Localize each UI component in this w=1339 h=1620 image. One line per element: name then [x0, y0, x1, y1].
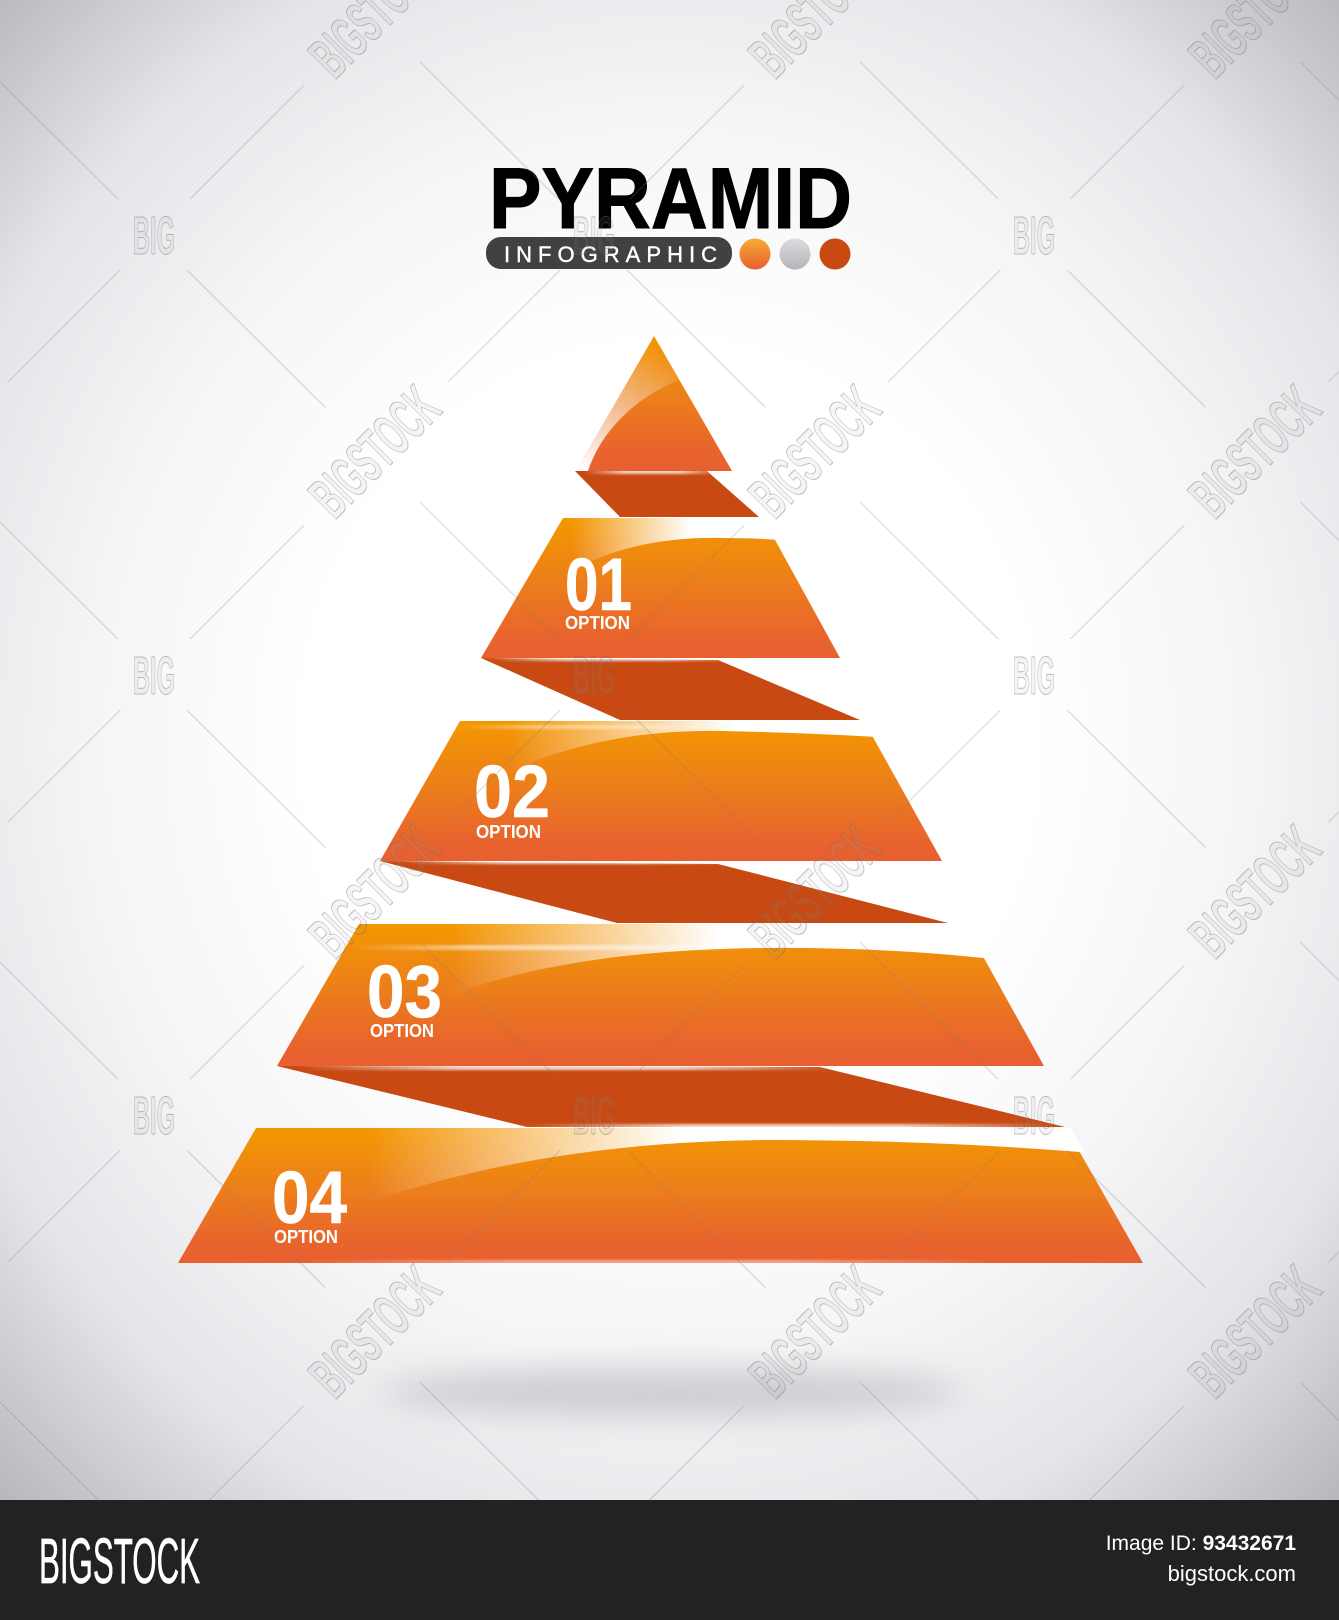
- connector band 2: [380, 858, 948, 923]
- watermark text: BIG: [133, 206, 175, 266]
- pyramid cap: [576, 336, 732, 471]
- tier 4: [178, 1128, 1143, 1264]
- ground shadow: [382, 1368, 962, 1416]
- watermark text: BIG: [1013, 206, 1055, 266]
- watermark text: BIG: [1013, 646, 1055, 706]
- tier 1 body: [481, 518, 840, 658]
- connector band 1: [481, 655, 860, 720]
- tier 3 body: [277, 924, 1044, 1066]
- site url: bigstock.com: [1168, 1561, 1296, 1586]
- watermark text: BIGSTOCK: [737, 374, 893, 530]
- tier 2 highlight line: [455, 725, 715, 729]
- watermark text: BIGSTOCK: [297, 814, 453, 970]
- tier 1 number: 01: [565, 543, 632, 626]
- subtitle pill: INFOGRAPHIC: [504, 242, 717, 267]
- tier 4 gloss: [178, 1128, 1085, 1263]
- tier 1 gloss: [481, 518, 779, 658]
- footer bar: [0, 1500, 1339, 1620]
- tier 3 label: OPTION: [370, 1021, 434, 1041]
- subtitle pill: [486, 237, 732, 269]
- tier 4 number: 04: [272, 1156, 347, 1239]
- pyramid: [178, 336, 1143, 1264]
- watermark text: BIG: [133, 646, 175, 706]
- tier 4 bottom highlight: [300, 1260, 1000, 1264]
- connector band top: [575, 468, 759, 517]
- watermark text: [133, 0, 1333, 1410]
- watermark text: BIGSTOCK: [737, 1254, 893, 1410]
- tier 2: [380, 721, 942, 861]
- tier 2 number: 02: [474, 750, 550, 833]
- tier 1: [481, 518, 840, 658]
- watermark text: BIGSTOCK: [297, 1254, 453, 1410]
- tier 4 label: OPTION: [274, 1227, 338, 1247]
- tier 4 body: [178, 1128, 1143, 1263]
- watermark text: BIG: [133, 1086, 175, 1146]
- tier 2 gloss: [380, 721, 877, 861]
- watermark text: BIG: [573, 646, 615, 706]
- tier 2 body: [380, 721, 942, 861]
- tier 1 label: OPTION: [565, 613, 630, 633]
- tier 3 highlight line: [350, 945, 750, 950]
- tier 3 number: 03: [367, 950, 442, 1033]
- connector band 3: [277, 1063, 1065, 1130]
- tier 3: [277, 924, 1044, 1066]
- tier 2 label: OPTION: [476, 822, 541, 842]
- watermark text: BIG: [573, 1086, 615, 1146]
- image id: Image ID: 93432671: [1106, 1532, 1296, 1555]
- watermark text: BIGSTOCK: [297, 374, 453, 530]
- watermark text: BIG: [1013, 1086, 1055, 1146]
- tier 3 gloss: [277, 924, 989, 1066]
- colour dots: [740, 238, 850, 270]
- title: PYRAMID: [489, 151, 852, 247]
- watermark text: BIG: [573, 206, 615, 266]
- watermark text: BIGSTOCK: [737, 814, 893, 970]
- footer bar: BIGSTOCK: [39, 1525, 200, 1597]
